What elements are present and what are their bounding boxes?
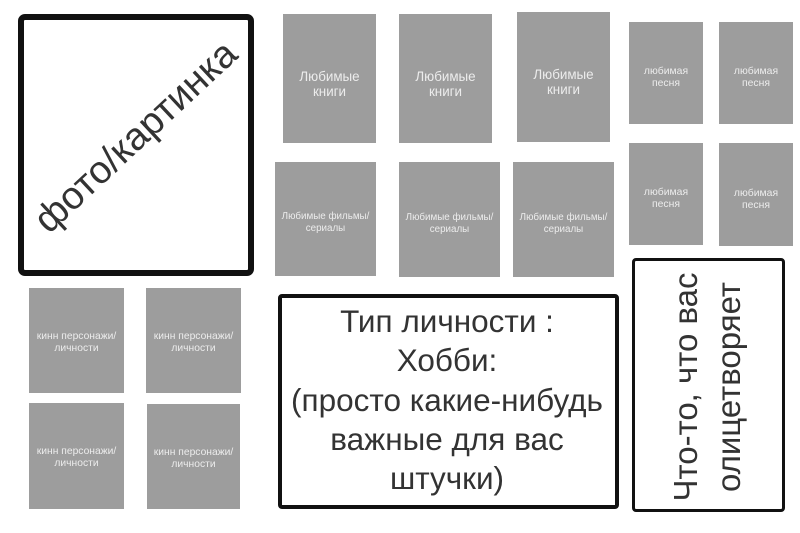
kin character card 3: личности	[54, 458, 99, 469]
kin character card 2: кинн персонажи/	[154, 330, 233, 342]
favorite book card 1: книги	[313, 84, 346, 98]
favorite song card 2	[719, 22, 793, 124]
panel: personality and hobbies: штучки)	[390, 460, 504, 496]
favorite song card 1: песня	[652, 78, 680, 89]
favorite movie card 2: Любимые фильмы/	[406, 212, 493, 222]
kin character card 4: кинн персонажи/	[154, 446, 233, 458]
favorite book card 2	[399, 14, 492, 143]
panel: photo placeholder	[18, 14, 254, 276]
favorite song card 4: песня	[742, 200, 770, 210]
favorite movie card 3	[513, 162, 614, 277]
kin character card 1	[29, 288, 124, 393]
favorite book card 2: Любимые	[415, 68, 476, 84]
kin character card 2: личности	[171, 342, 216, 354]
kin character card 2	[146, 288, 241, 393]
favorite song card 3: песня	[652, 199, 680, 210]
favorite song card 3	[629, 143, 703, 245]
panel: personality and hobbies: Тип личности :	[340, 303, 554, 339]
favorite book card 2: книги	[429, 84, 462, 98]
favorite movie card 1: сериалы	[306, 223, 345, 234]
vertical label: Что-то, что вас	[667, 272, 704, 502]
favorite movie card 3: сериалы	[544, 224, 583, 234]
favorite movie card 2: сериалы	[430, 224, 469, 234]
favorite movie card 2	[399, 162, 500, 277]
favorite movie card 1	[275, 162, 376, 276]
favorite song card 1: любимая	[644, 66, 688, 77]
favorite book card 1	[283, 14, 376, 143]
favorite movie card 1: Любимые фильмы/	[282, 211, 369, 222]
panel: personality and hobbies: важные для вас	[330, 421, 564, 457]
favorite song card 1	[629, 22, 703, 124]
favorite book card 3	[517, 12, 610, 142]
favorite book card 3: Любимые	[533, 67, 594, 82]
kin character card 1: кинн персонажи/	[37, 330, 116, 342]
kin character card 4: личности	[171, 458, 216, 470]
favorite song card 2: песня	[742, 78, 770, 89]
panel: personality and hobbies	[278, 294, 619, 509]
panel: personality and hobbies: Хобби:	[397, 342, 497, 378]
favorite song card 4	[719, 143, 793, 246]
kin character card 3	[29, 403, 124, 509]
photo placeholder label: фото/картинка	[26, 32, 246, 241]
kin character card 4	[147, 404, 240, 509]
favorite song card 3: любимая	[644, 187, 688, 198]
favorite book card 3: книги	[547, 82, 580, 97]
panel: personality and hobbies: (просто какие-нибудь	[291, 382, 603, 418]
vertical label	[667, 272, 747, 502]
kin character card 1: личности	[54, 342, 99, 354]
vertical label: олицетворяет	[710, 282, 747, 492]
favorite book card 1: Любимые	[299, 68, 360, 84]
panel: what represents you	[632, 258, 785, 512]
favorite song card 2: любимая	[734, 66, 778, 77]
favorite song card 4: любимая	[734, 188, 778, 198]
kin character card 3: кинн персонажи/	[37, 446, 116, 457]
favorite movie card 3: Любимые фильмы/	[520, 212, 607, 222]
